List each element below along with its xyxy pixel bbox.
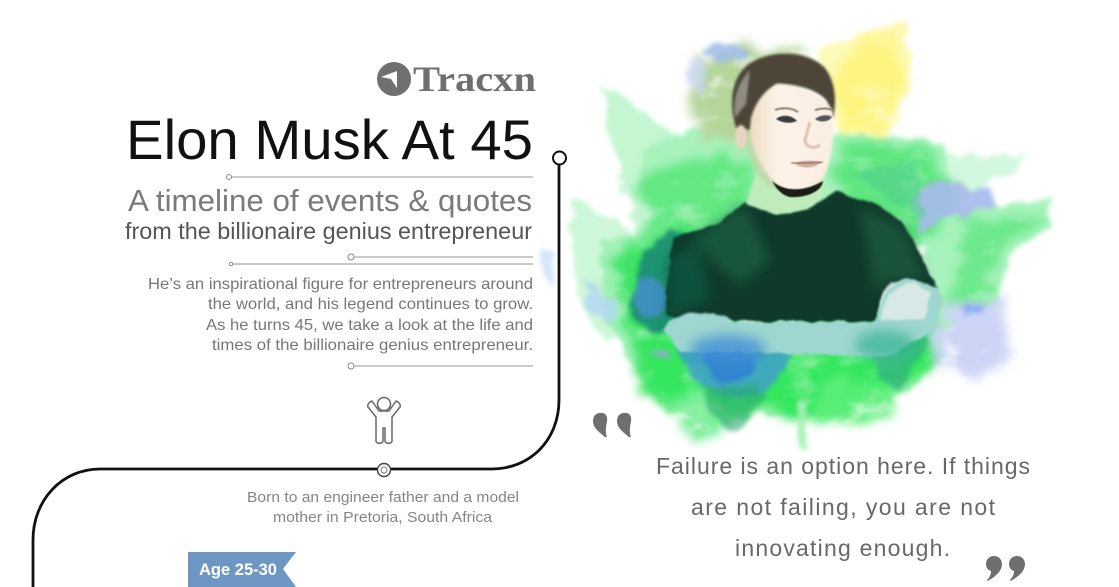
- logo: Tracxn: [377, 59, 536, 99]
- hair: [732, 54, 835, 130]
- quote text: [656, 453, 1030, 561]
- facial features: [775, 108, 832, 167]
- crossed arms: [664, 280, 942, 358]
- icon: Tracxn mark: [377, 62, 411, 96]
- birth description: [247, 489, 519, 526]
- icon: closing quote mark: [986, 556, 1025, 581]
- watercolor wash background: [540, 18, 1050, 448]
- quote text: are not failing, you are not: [691, 494, 996, 520]
- subtitle second line: from the billionaire genius entrepreneur: [125, 218, 532, 244]
- neck: [746, 170, 826, 214]
- title: Elon Musk At 45: [126, 108, 533, 171]
- face: [749, 84, 833, 190]
- t-shirt: [666, 192, 938, 322]
- quote text: Failure is an option here. If things: [656, 453, 1030, 479]
- timeline start node: [553, 152, 566, 164]
- portrait: watercolor illustration of Elon Musk: [540, 18, 1050, 448]
- timeline birth node: [378, 464, 390, 476]
- timeline line: [33, 165, 559, 587]
- quote text: innovating enough.: [735, 535, 950, 561]
- intro paragraph: As he turns 45, we take a look at the life and: [206, 317, 533, 334]
- birth description: Born to an engineer father and a model: [247, 489, 519, 506]
- subtitle: A timeline of events & quotes: [128, 183, 532, 218]
- icon: child with raised arms: [368, 398, 400, 443]
- age ribbon: [188, 552, 296, 587]
- birth description: mother in Pretoria, South Africa: [273, 509, 493, 526]
- logo wordmark: Tracxn: [413, 59, 536, 99]
- intro paragraph: [148, 276, 533, 354]
- intro paragraph: the world, and his legend continues to grow.: [208, 296, 533, 313]
- jaw shadow: [772, 181, 823, 197]
- intro paragraph: times of the billionaire genius entrepreneur.: [212, 337, 533, 354]
- ear: [735, 125, 747, 149]
- intro paragraph: He’s an inspirational figure for entrepreneurs around: [148, 276, 533, 293]
- icon: opening quote mark: [593, 413, 631, 437]
- age ribbon: Age 25-30: [199, 560, 277, 579]
